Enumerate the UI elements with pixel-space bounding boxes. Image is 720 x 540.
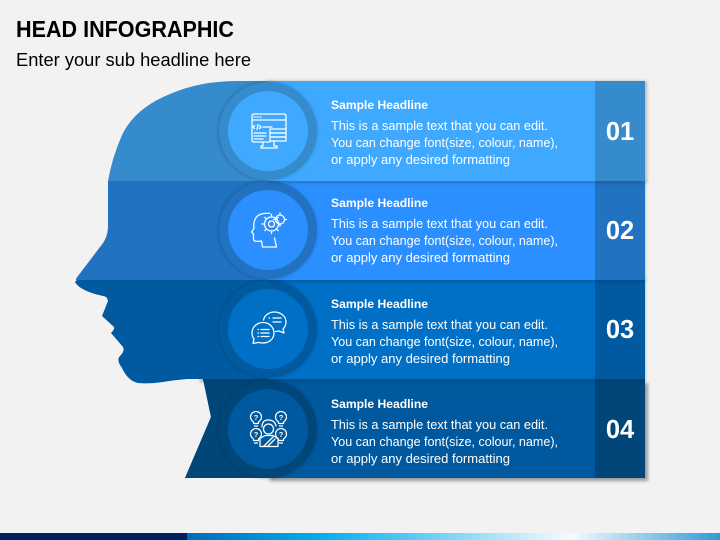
- number 01: 01: [606, 118, 634, 146]
- body text 4: You can change font(size, colour, name),: [331, 434, 558, 449]
- body text 1: This is a sample text that you can edit.: [331, 118, 548, 133]
- panel 3: [75, 278, 645, 383]
- body text 3: [331, 317, 558, 366]
- heading 4: Sample Headline: [331, 397, 428, 411]
- body text 1: or apply any desired formatting: [331, 152, 510, 167]
- circle 2: [218, 180, 317, 280]
- body text 1: [331, 118, 558, 167]
- icon: person with question bulbs: [250, 412, 286, 446]
- circle 4: [218, 380, 317, 478]
- icon: person with question bulbs: ?: [254, 430, 259, 439]
- body text 3: You can change font(size, colour, name),: [331, 334, 558, 349]
- body text 2: This is a sample text that you can edit.: [331, 216, 548, 231]
- heading 1: Sample Headline: [331, 98, 428, 112]
- heading 2: Sample Headline: [331, 196, 428, 210]
- body text 2: You can change font(size, colour, name),: [331, 233, 558, 248]
- heading 3: Sample Headline: [331, 297, 428, 311]
- number 03: 03: [606, 316, 634, 344]
- icon: head with gears: [252, 213, 286, 247]
- circle 1: [218, 82, 317, 180]
- footer bar: [0, 533, 720, 540]
- body text 3: or apply any desired formatting: [331, 351, 510, 366]
- body text 4: or apply any desired formatting: [331, 451, 510, 466]
- body text 2: or apply any desired formatting: [331, 250, 510, 265]
- icon: speech bubbles: [252, 312, 286, 343]
- subtitle: Enter your sub headline here: [16, 50, 251, 70]
- body text 1: You can change font(size, colour, name),: [331, 135, 558, 150]
- panel 2: [76, 180, 645, 282]
- number 04: 04: [606, 416, 635, 444]
- title: HEAD INFOGRAPHIC: [16, 16, 234, 42]
- circle 3: [218, 280, 317, 378]
- body text 4: [331, 417, 558, 466]
- body text 2: [331, 216, 558, 265]
- panel 4: [185, 379, 645, 478]
- number 02: 02: [606, 217, 634, 245]
- icon: person with question bulbs: ?: [254, 413, 259, 422]
- body text 3: This is a sample text that you can edit.: [331, 317, 548, 332]
- panel 1: [108, 81, 647, 183]
- band 4 shadow: [270, 383, 648, 481]
- icon: monitor with code: [252, 114, 286, 148]
- icon: person with question bulbs: ?: [279, 413, 284, 422]
- icon: person with question bulbs: ?: [279, 430, 284, 439]
- body text 4: This is a sample text that you can edit.: [331, 417, 548, 432]
